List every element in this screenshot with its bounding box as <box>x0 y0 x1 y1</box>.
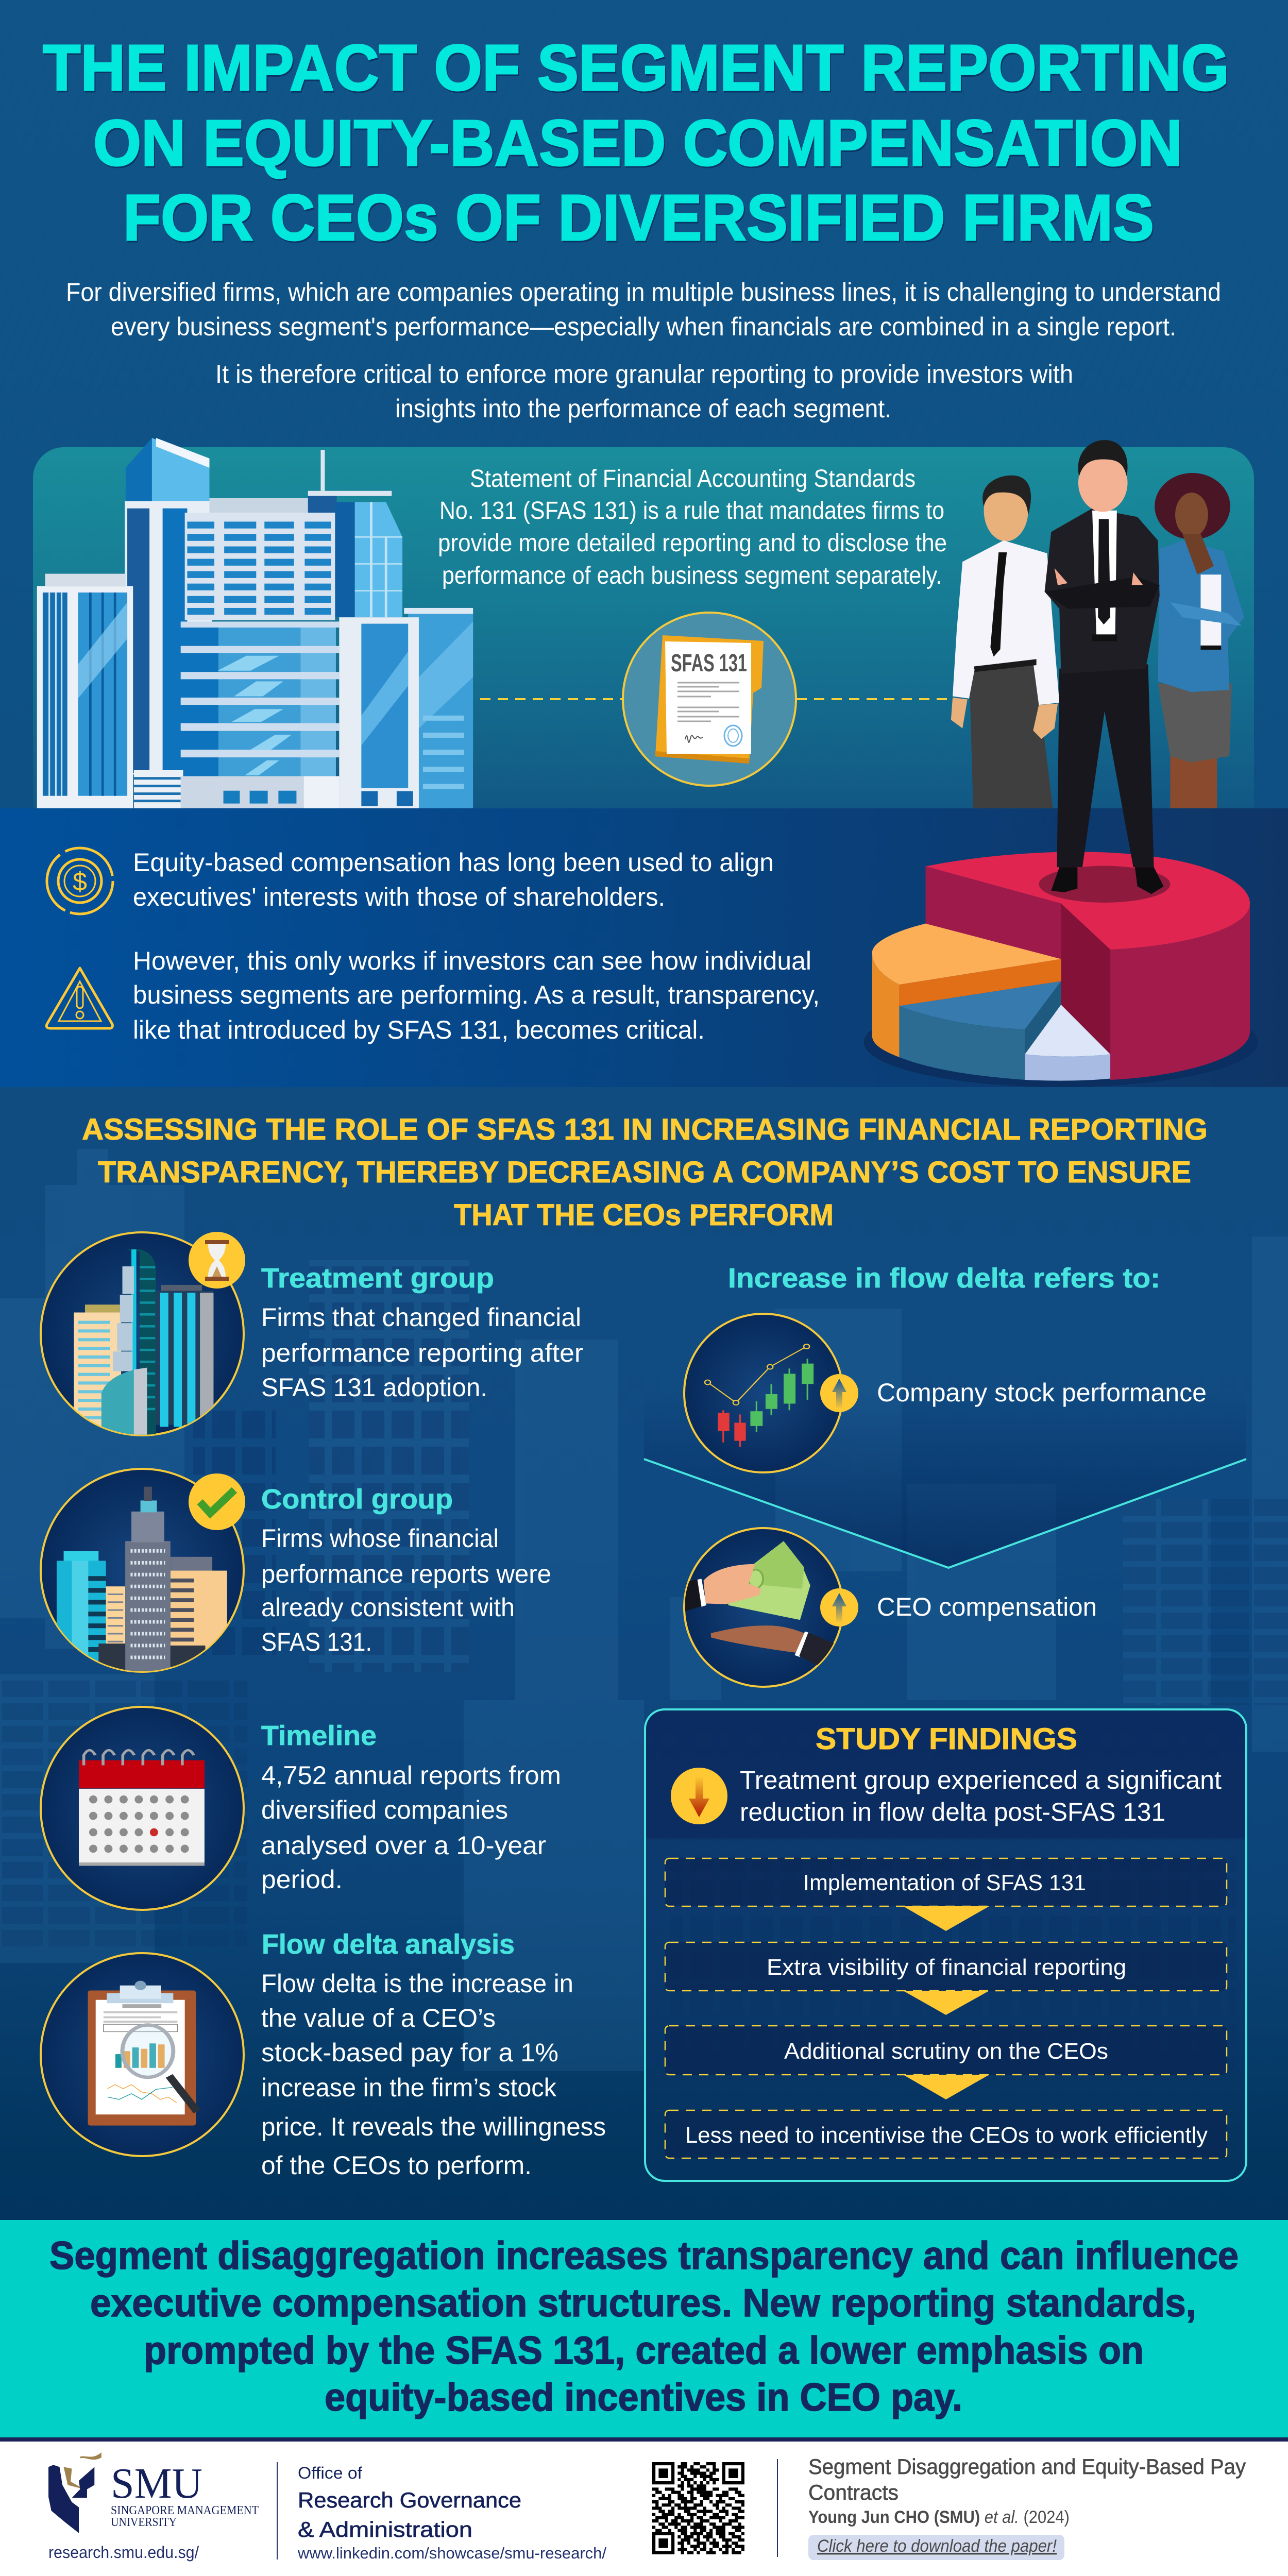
title <box>43 31 1229 254</box>
flow delta text <box>261 1929 606 2180</box>
timeline text: analysed over a 10-year <box>261 1831 546 1860</box>
panel: conclusion <box>0 2220 1288 2437</box>
icon: dollar coin <box>47 848 113 914</box>
treatment text: performance reporting after <box>261 1338 583 1367</box>
intro text <box>66 278 1221 423</box>
button: download paper: Click here to download the paper! <box>817 2536 1057 2556</box>
panel: SFAS 131 teal panel <box>33 447 1254 808</box>
office of research governance <box>277 2462 606 2562</box>
paper citation <box>777 2454 1246 2560</box>
equity compensation text: like that introduced by SFAS 131, becomes critical. <box>133 1015 705 1044</box>
treatment text: Treatment group <box>261 1263 494 1294</box>
timeline text: period. <box>261 1865 343 1894</box>
icon: dollar coin: $ <box>73 867 87 896</box>
arrow: step 2 to 3 <box>903 1991 989 2015</box>
title: ON EQUITY-BASED COMPENSATION <box>93 107 1182 179</box>
icon: SFAS 131 document: SFAS 131 <box>671 650 747 677</box>
flow delta analysis <box>41 1929 606 2180</box>
icon: warning triangle <box>46 968 112 1028</box>
icon: SFAS 131 document <box>623 613 796 786</box>
flow delta text: stock-based pay for a 1% <box>261 2038 558 2067</box>
panel: conclusion: prompted by the SFAS 131, created a lower emphasis on <box>144 2329 1144 2372</box>
paper citation: Young Jun CHO (SMU) et al. (2024) <box>808 2507 1070 2527</box>
control text: Control group <box>261 1484 453 1515</box>
step: visibility: Extra visibility of financial reporting <box>767 1955 1126 1980</box>
control text: SFAS 131. <box>261 1628 372 1656</box>
icon: candlestick chart <box>684 1314 858 1472</box>
logo: SMU: SINGAPORE MANAGEMENT <box>111 2504 259 2517</box>
step: implementation <box>665 1858 1227 1906</box>
stock label: Company stock performance <box>877 1378 1207 1407</box>
control text <box>261 1484 551 1656</box>
finding summary: Treatment group experienced a significant <box>740 1766 1222 1794</box>
heading: increase in flow delta: Increase in flow delta refers to: <box>728 1263 1160 1294</box>
panel: conclusion: Segment disaggregation increases transparency and can influence <box>49 2234 1239 2278</box>
illustration: three executives <box>951 440 1244 894</box>
flow delta text: price. It reveals the willingness <box>261 2112 606 2141</box>
woman executive <box>1155 473 1244 808</box>
statement text: Statement of Financial Accounting Standards <box>470 465 916 493</box>
QR code <box>652 2462 744 2554</box>
office of research governance: www.linkedin.com/showcase/smu-research/ <box>297 2544 606 2562</box>
logo: SMU <box>48 2452 259 2562</box>
intro text: It is therefore critical to enforce more granular reporting to provide investors with <box>215 360 1073 388</box>
statement text: No. 131 (SFAS 131) is a rule that mandates firms to <box>439 497 944 524</box>
illustration: pie chart <box>864 852 1258 1087</box>
heading: assessing the role: TRANSPARENCY, THEREBY DECREASING A COMPANY’S COST TO ENSURE <box>98 1156 1191 1189</box>
CEO compensation <box>684 1528 1097 1687</box>
arrow: chevron funnel <box>644 1391 1246 1568</box>
finding summary <box>740 1766 1222 1826</box>
intro text: every business segment's performance—especially when financials are combined in a single report. <box>111 312 1176 341</box>
timeline text <box>261 1720 561 1894</box>
illustration: office buildings <box>37 438 473 808</box>
paper citation: Segment Disaggregation and Equity-Based Pay <box>808 2454 1246 2479</box>
panel: equity compensation band <box>0 808 1288 1087</box>
office of research governance: & Administration <box>298 2517 472 2541</box>
step: less need <box>665 2110 1227 2158</box>
arrow: step 1 to 2 <box>903 1906 989 1931</box>
control text: performance reports were <box>261 1560 551 1588</box>
step: visibility <box>665 1942 1227 1991</box>
control text: already consistent with <box>261 1593 515 1622</box>
equity compensation text: business segments are performing. As a result, transparency, <box>133 980 820 1009</box>
timeline <box>41 1707 561 1910</box>
step: scrutiny: Additional scrutiny on the CEOs <box>784 2039 1108 2064</box>
intro text: insights into the performance of each segment. <box>395 394 891 423</box>
step: implementation: Implementation of SFAS 131 <box>803 1870 1086 1895</box>
equity compensation text: executives' interests with those of shareholders. <box>133 883 665 911</box>
title: THE IMPACT OF SEGMENT REPORTING <box>43 31 1229 104</box>
panel: study findings <box>645 1709 1246 2181</box>
header background <box>0 0 1288 809</box>
arrow: step 3 to 4 <box>903 2075 989 2099</box>
statement text <box>438 465 947 589</box>
lower section background with skyline <box>0 1087 1288 2220</box>
flow delta text: increase in the firm’s stock <box>261 2073 557 2102</box>
treatment group <box>41 1232 583 1435</box>
treatment text: SFAS 131 adoption. <box>261 1373 487 1402</box>
equity compensation text <box>133 848 820 1044</box>
paper citation: Contracts <box>808 2480 899 2504</box>
icon: hands with money <box>684 1528 858 1687</box>
flow delta text: Flow delta analysis <box>262 1929 515 1960</box>
icon: treatment buildings <box>41 1232 245 1435</box>
icon: calendar <box>41 1707 244 1910</box>
intro text: For diversified firms, which are companies operating in multiple business lines, it is challenging to understand <box>66 278 1221 307</box>
timeline text: 4,752 annual reports from <box>261 1761 561 1790</box>
icon: clipboard with chart <box>41 1953 244 2156</box>
treatment text: Firms that changed financial <box>261 1303 581 1332</box>
flow delta text: Flow delta is the increase in <box>261 1969 573 1998</box>
heading: assessing the role: THAT THE CEOs PERFORM <box>454 1198 834 1232</box>
control text: Firms whose financial <box>261 1524 499 1553</box>
heading: assessing the role <box>82 1113 1208 1232</box>
heading: assessing the role: ASSESSING THE ROLE OF SFAS 131 IN INCREASING FINANCIAL REPORTING <box>82 1113 1208 1146</box>
treatment text <box>261 1263 583 1402</box>
footer <box>0 2437 1288 2576</box>
title: FOR CEOs OF DIVERSIFIED FIRMS <box>123 181 1154 254</box>
dashed connector <box>480 698 957 700</box>
office of research governance: Office of <box>298 2464 362 2482</box>
step: scrutiny <box>665 2026 1227 2075</box>
panel: conclusion: executive compensation structures. New reporting standards, <box>90 2281 1196 2325</box>
equity compensation text: However, this only works if investors can see how individual <box>133 946 811 975</box>
logo: SMU: SMU <box>111 2460 202 2507</box>
company stock performance <box>684 1314 1207 1472</box>
timeline text: Timeline <box>261 1720 377 1751</box>
statement text: provide more detailed reporting and to disclose the <box>438 530 947 557</box>
panel: conclusion: equity-based incentives in CEO pay. <box>325 2376 962 2419</box>
logo: SMU: research.smu.edu.sg/ <box>48 2543 199 2562</box>
man in white shirt <box>951 476 1059 808</box>
CEO compensation label: CEO compensation <box>877 1592 1097 1621</box>
finding summary: reduction in flow delta post-SFAS 131 <box>740 1798 1165 1826</box>
logo: SMU: UNIVERSITY <box>111 2516 177 2529</box>
heading: study findings: STUDY FINDINGS <box>816 1722 1077 1756</box>
icon: control buildings <box>41 1469 245 1672</box>
office of research governance: Research Governance <box>298 2488 521 2512</box>
flow delta text: the value of a CEO’s <box>261 2004 496 2032</box>
icon: down arrow <box>671 1768 727 1824</box>
timeline text: diversified companies <box>261 1795 508 1824</box>
man in black suit <box>1045 440 1164 894</box>
statement text: performance of each business segment separately. <box>442 562 942 589</box>
control group <box>41 1469 551 1672</box>
step: less need: Less need to incentivise the CEOs to work efficiently <box>685 2123 1208 2148</box>
flow delta text: of the CEOs to perform. <box>261 2151 532 2180</box>
equity compensation text: Equity-based compensation has long been used to align <box>133 848 774 877</box>
